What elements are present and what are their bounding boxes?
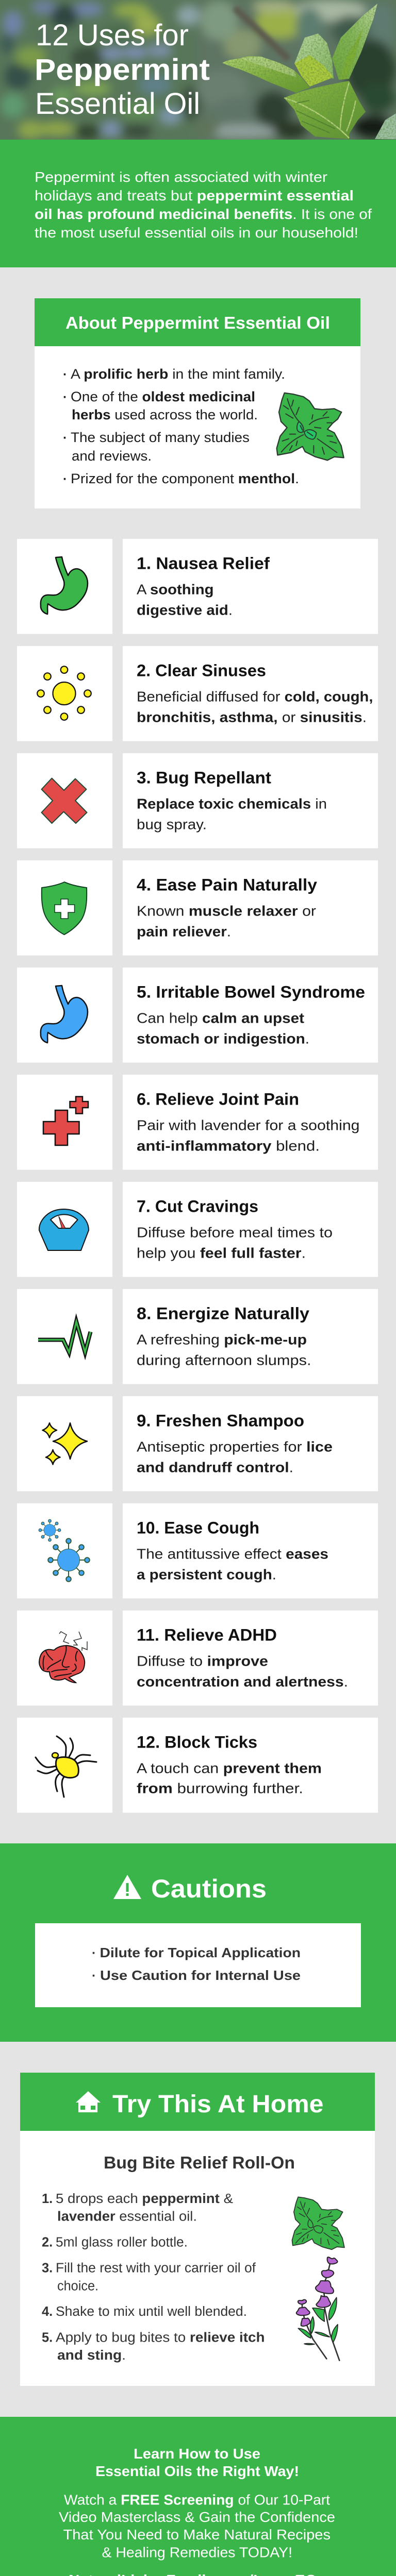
- use 11: relieve adhd: [17, 1611, 378, 1705]
- recipe steps: choice.: [57, 2279, 98, 2294]
- about heading: About Peppermint Essential Oil: [65, 313, 330, 332]
- cautions box: ·: [92, 1969, 96, 1983]
- cautions heading: Cautions: [151, 1874, 267, 1903]
- icon: shield with cross: [42, 882, 87, 935]
- heading and text 11: 11. Relieve ADHD: [137, 1626, 277, 1645]
- heading and text 10: The antitussive effect eases: [137, 1546, 328, 1562]
- text card 6: [123, 1075, 378, 1170]
- about bullet list: [63, 366, 299, 486]
- use 1: nausea relief: [17, 539, 378, 634]
- hero photo: blurred foliage: [0, 0, 396, 140]
- text card 9: [123, 1396, 378, 1491]
- heading and text 12: from burrowing further.: [137, 1781, 303, 1796]
- icon: weighing scale: [39, 1209, 89, 1250]
- heading and text 10: a persistent cough .: [137, 1566, 276, 1583]
- use 9: freshen shampoo: [17, 1396, 378, 1491]
- icon card 7: [17, 1182, 112, 1277]
- icon: house: [76, 2091, 101, 2112]
- recipe steps: 3.: [42, 2261, 53, 2275]
- heading and text 8: 8. Energize Naturally: [137, 1304, 309, 1323]
- recipe steps: lavender essential oil.: [57, 2209, 197, 2224]
- icon: brain with sparks: [39, 1632, 87, 1683]
- recipe steps: Shake to mix until well blended.: [56, 2304, 247, 2319]
- heading and text 10: [137, 1519, 328, 1583]
- recipe steps: 5ml glass roller bottle.: [56, 2235, 188, 2249]
- heading and text 6: 6. Relieve Joint Pain: [137, 1090, 299, 1109]
- icon card 12: [17, 1718, 112, 1812]
- heading and text 2: 2. Clear Sinuses: [137, 662, 266, 680]
- heading and text 3: [137, 769, 327, 833]
- text card 1: [123, 539, 378, 634]
- heading and text 9: 9. Freshen Shampoo: [137, 1412, 304, 1430]
- heading and text 1: [137, 554, 270, 618]
- heading and text 9: Antiseptic properties for lice: [137, 1438, 333, 1455]
- text card 7: [123, 1182, 378, 1277]
- about heading: [35, 298, 360, 346]
- heading and text 2: bronchitis, asthma, or sinusitis .: [137, 709, 367, 725]
- cta body: [59, 2492, 335, 2561]
- heading and text 7: help you feel full faster .: [137, 1245, 306, 1261]
- cta heading: Essential Oils the Right Way!: [95, 2463, 299, 2479]
- about bullet list: A prolific herb in the mint family.: [71, 366, 285, 382]
- icon card 11: [17, 1611, 112, 1705]
- icon: red x: [41, 778, 87, 823]
- heading and text 5: stomach or indigestion .: [137, 1030, 309, 1047]
- intro paragraph: [35, 169, 372, 241]
- heading and text 5: Can help calm an upset: [137, 1010, 304, 1026]
- heading and text 1: digestive aid .: [137, 602, 233, 618]
- icon card 3: [17, 753, 112, 848]
- use 5: irritable bowel syndrome: [17, 968, 378, 1062]
- icon: sparkles: [42, 1423, 87, 1464]
- icon: blue stomach: [41, 986, 88, 1043]
- cta body: & Healing Remedies TODAY!: [102, 2544, 292, 2561]
- text card 5: [123, 968, 378, 1062]
- about bullet list: Prized for the component menthol .: [71, 471, 299, 486]
- heading and text 7: [137, 1197, 333, 1261]
- icon: sinus dots: [37, 666, 91, 720]
- cautions box: Dilute for Topical Application: [100, 1945, 301, 1960]
- heading and text 11: Diffuse to improve: [137, 1653, 268, 1669]
- heading and text 6: anti-inflammatory blend.: [137, 1138, 320, 1154]
- heading and text 2: [137, 662, 373, 725]
- text card 4: [123, 860, 378, 955]
- about bullet list: One of the oldest medicinal: [71, 389, 255, 404]
- text card 2: [123, 646, 378, 741]
- icon: pulse line: [38, 1321, 91, 1352]
- panel: about peppermint: [35, 298, 360, 509]
- heading and text 12: 12. Block Ticks: [137, 1733, 257, 1752]
- heading and text 3: Replace toxic chemicals in: [137, 795, 327, 812]
- recipe steps: Apply to bug bites to relieve itch: [56, 2331, 265, 2345]
- panel: call to action: [0, 2417, 396, 2576]
- icon card 10: [17, 1503, 112, 1598]
- heading and text 6: Pair with lavender for a soothing: [137, 1117, 360, 1133]
- icon card 8: [17, 1289, 112, 1384]
- cta heading: Learn How to Use: [134, 2446, 260, 2462]
- icon card 1: [17, 539, 112, 634]
- text card 11: [123, 1611, 378, 1705]
- cta body: Watch a FREE Screening of Our 10-Part: [64, 2492, 330, 2508]
- heading and text 12: A touch can prevent them: [137, 1760, 322, 1776]
- icon: mint sprig: [277, 393, 344, 460]
- icon card 6: [17, 1075, 112, 1170]
- hero title: [37, 24, 209, 114]
- panel: try this at home: [20, 2073, 375, 2386]
- text card 12: [123, 1718, 378, 1812]
- text card 8: [123, 1289, 378, 1384]
- hero title: Essential Oil: [35, 87, 200, 121]
- text card 3: [123, 753, 378, 848]
- about bullet list: ·: [63, 390, 67, 404]
- intro band: [0, 140, 396, 267]
- heading and text 8: [137, 1304, 311, 1368]
- about bullet list: The subject of many studies: [71, 430, 250, 445]
- icon: virus particles: [39, 1519, 90, 1582]
- about bullet list: ·: [63, 472, 67, 486]
- try heading band: Try This At Home: [112, 2091, 324, 2118]
- intro paragraph: holidays and treats but peppermint essential: [35, 188, 354, 204]
- hero banner: [0, 0, 396, 140]
- icon: warning triangle: [113, 1875, 141, 1899]
- heading and text 9: and dandruff control .: [137, 1459, 293, 1476]
- heading and text 5: 5. Irritable Bowel Syndrome: [137, 983, 365, 1002]
- cta heading: [95, 2446, 299, 2479]
- icon: mint sprig small: [292, 2197, 344, 2249]
- heading and text 6: [137, 1090, 360, 1154]
- icon: red crosses: [43, 1096, 88, 1145]
- hero photo: mint leaves: [222, 4, 396, 139]
- recipe steps: 2.: [42, 2235, 53, 2249]
- heading and text 5: [137, 983, 365, 1047]
- intro paragraph: the most useful essential oils in our household!: [35, 225, 358, 241]
- heading and text 3: 3. Bug Repellant: [137, 769, 271, 787]
- heading and text 12: [137, 1733, 322, 1796]
- cta body: Video Masterclass & Gain the Confidence: [59, 2509, 335, 2525]
- cautions box: Use Caution for Internal Use: [100, 1968, 301, 1983]
- recipe steps: 5.: [42, 2331, 53, 2345]
- heading and text 4: Known muscle relaxer or: [137, 903, 316, 919]
- heading and text 8: during afternoon slumps.: [137, 1352, 311, 1368]
- cta body: That You Need to Make Natural Recipes: [63, 2527, 331, 2543]
- use 2: clear sinuses: [17, 646, 378, 741]
- intro paragraph: oil has profound medicinal benefits . It is one of: [35, 206, 372, 222]
- use 4: ease pain naturally: [17, 860, 378, 955]
- heading and text 7: 7. Cut Cravings: [137, 1197, 258, 1216]
- icon: tick: [36, 1736, 96, 1797]
- heading and text 11: [137, 1626, 348, 1690]
- heading and text 3: bug spray.: [137, 816, 207, 833]
- use 10: ease cough: [17, 1503, 378, 1598]
- icon card 9: [17, 1396, 112, 1491]
- hero title: Peppermint: [35, 53, 210, 87]
- recipe steps: 1.: [42, 2192, 53, 2206]
- recipe steps: 4.: [42, 2304, 53, 2319]
- heading and text 4: pain reliever .: [137, 923, 231, 940]
- recipe steps: 5 drops each peppermint &: [56, 2192, 233, 2206]
- use 7: cut cravings: [17, 1182, 378, 1277]
- heading and text 4: 4. Ease Pain Naturally: [137, 876, 317, 894]
- intro paragraph: Peppermint is often associated with winter: [35, 169, 327, 185]
- heading and text 2: Beneficial diffused for cold, cough,: [137, 688, 373, 705]
- icon: lavender: [296, 2257, 339, 2361]
- heading and text 1: A soothing: [137, 581, 213, 598]
- heading and text 7: Diffuse before meal times to: [137, 1224, 333, 1241]
- heading and text 4: [137, 876, 317, 940]
- recipe steps: and sting .: [57, 2348, 126, 2363]
- cautions box: ·: [92, 1946, 96, 1960]
- text card 10: [123, 1503, 378, 1598]
- use 8: energize naturally: [17, 1289, 378, 1384]
- use 3: bug repellant: [17, 753, 378, 848]
- recipe steps: [42, 2192, 265, 2363]
- recipe title: Bug Bite Relief Roll-On: [104, 2153, 295, 2172]
- heading and text 1: 1. Nausea Relief: [137, 554, 270, 573]
- icon: green stomach: [41, 557, 88, 614]
- icon card 2: [17, 646, 112, 741]
- about bullet list: and reviews.: [72, 448, 152, 464]
- use 6: relieve joint pain: [17, 1075, 378, 1170]
- use 12: block ticks: [17, 1718, 378, 1812]
- icon card 5: [17, 968, 112, 1062]
- about bullet list: herbs used across the world.: [72, 407, 258, 422]
- hero title: 12 Uses for: [36, 19, 189, 52]
- panel: cautions: [0, 1843, 396, 2042]
- heading and text 9: [137, 1412, 333, 1476]
- heading and text 11: concentration and alertness .: [137, 1673, 348, 1690]
- about bullet list: ·: [63, 367, 67, 382]
- about bullet list: ·: [63, 431, 67, 445]
- heading and text 10: 10. Ease Cough: [137, 1519, 259, 1537]
- recipe steps: Fill the rest with your carrier oil of: [56, 2261, 256, 2275]
- heading and text 8: A refreshing pick-me-up: [137, 1331, 307, 1348]
- cautions box: [35, 1923, 361, 2007]
- icon card 4: [17, 860, 112, 955]
- try heading band: [20, 2073, 375, 2131]
